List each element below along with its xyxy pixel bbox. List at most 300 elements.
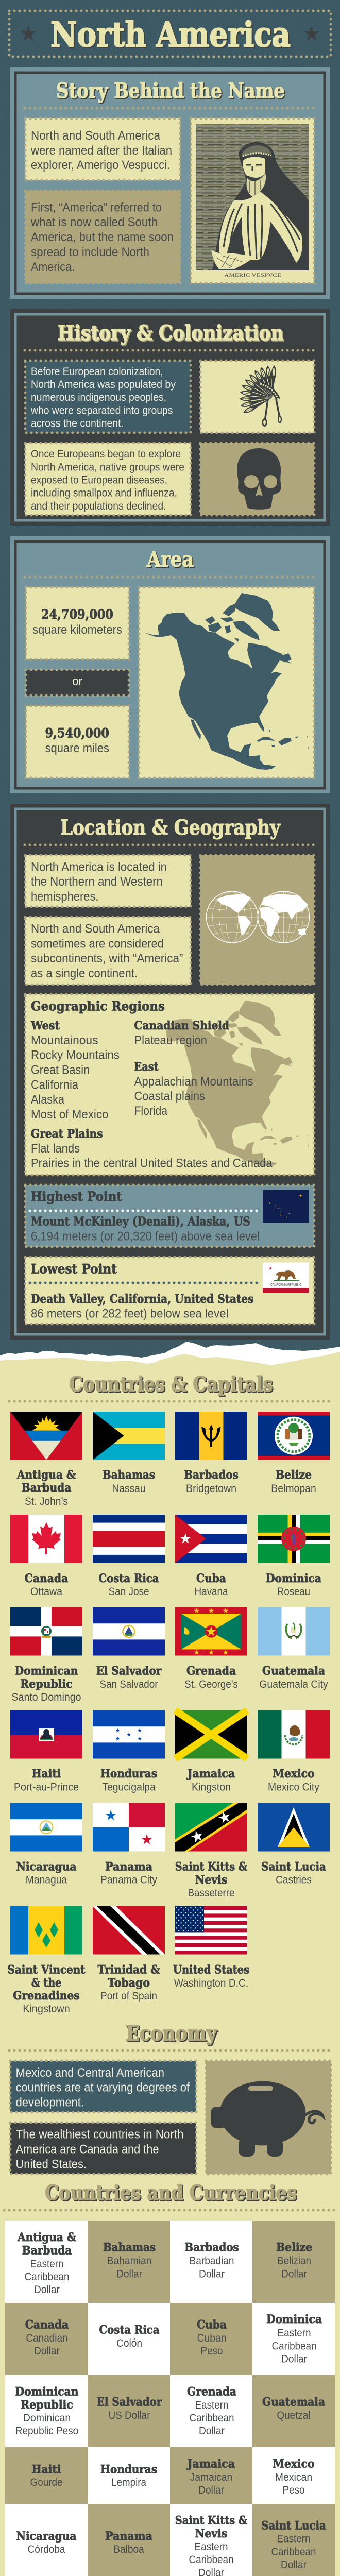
country label	[184, 1664, 238, 1690]
cell: Saint Kitts & Nevis: Nevis	[195, 2527, 227, 2540]
cell: Haiti: Gourde	[30, 2477, 63, 2488]
heading: Story Behind the Name: Story Behind the Name	[56, 79, 285, 103]
country label	[268, 1767, 319, 1793]
country: Saint Kitts & Nevis	[175, 1803, 247, 1899]
country label: Dominica	[266, 1572, 321, 1585]
cell: Dominican Republic	[5, 2375, 88, 2447]
map: North America	[139, 587, 314, 778]
stat: square miles: 9,540,000	[45, 725, 109, 741]
country label	[195, 1572, 228, 1598]
cell: Saint Lucia	[252, 2504, 335, 2576]
text box: subcontinents: subcontinents, with “America”	[31, 952, 183, 965]
flag: Bahamas	[93, 1412, 165, 1460]
panel: Highest Point: Mount McKinley (Denali), Alaska, US	[31, 1215, 250, 1228]
country label	[14, 1767, 79, 1793]
heading: History & Colonization: History & Colonization	[58, 321, 283, 345]
region: West: Great Basin	[31, 1063, 90, 1077]
flag: Cuba	[175, 1515, 247, 1563]
cell: Jamaica: Jamaican	[190, 2471, 232, 2483]
flag: Belize	[258, 1412, 330, 1460]
country label: Trinidad &	[98, 1963, 160, 1976]
cell: Guatemala	[252, 2375, 335, 2447]
torn paper edge: upper	[0, 1342, 340, 1370]
country label	[100, 1860, 157, 1886]
cell: Bahamas: Dollar	[116, 2268, 142, 2280]
region: Great Plains: Flat lands	[31, 1142, 80, 1156]
text box: naming: were named after the Italian	[30, 144, 172, 158]
country: Grenada	[175, 1607, 247, 1690]
flag: Dominica	[258, 1515, 330, 1563]
region: West	[30, 1019, 120, 1122]
cell: Dominican Republic: Dominican	[15, 2385, 78, 2399]
cell: Antigua & Barbuda: Antigua &	[17, 2231, 76, 2244]
country label: Costa Rica	[99, 1572, 159, 1585]
country label: Nassau	[112, 1483, 145, 1495]
country: Antigua & Barbuda	[10, 1412, 82, 1507]
cell: Dominican Republic: Republic Peso	[15, 2425, 78, 2437]
text box: subcontinents: North and South America	[31, 922, 160, 936]
heading: Countries and Currencies: Countries and Currencies	[45, 2181, 297, 2205]
cell: Haiti	[5, 2447, 88, 2504]
country label: San Salvador	[100, 1679, 158, 1690]
flag: Trinidad & Tobago	[93, 1906, 165, 1955]
stat: square kilometers: 24,709,000	[41, 607, 113, 622]
panel: Story Behind the Name	[10, 67, 330, 299]
country: El Salvador	[93, 1607, 165, 1690]
country label: Tegucigalpa	[102, 1782, 156, 1793]
text box: subcontinents: sometimes are considered	[31, 937, 164, 951]
region: East: East	[134, 1060, 159, 1074]
country: Belize	[258, 1412, 330, 1495]
panel: Location & Geography	[10, 804, 330, 1340]
country label	[103, 1468, 155, 1495]
country label: Barbados	[184, 1468, 239, 1482]
cell: Nicaragua: Córdoba	[28, 2544, 65, 2555]
country label	[259, 1664, 328, 1690]
country: Trinidad & Tobago	[93, 1906, 165, 2002]
flag: California	[263, 1262, 309, 1293]
title text: North America	[50, 14, 291, 55]
flag: Barbados	[175, 1412, 247, 1460]
cell: Saint Lucia: Dollar	[281, 2559, 307, 2571]
cell: Barbados: Barbados	[184, 2241, 239, 2255]
cell: Barbados	[170, 2221, 252, 2303]
cell: Antigua & Barbuda: Eastern	[30, 2258, 64, 2270]
icon: world globes	[200, 855, 314, 985]
cell: Saint Lucia: Caribbean	[271, 2546, 316, 2558]
country label: San Jose	[108, 1586, 149, 1598]
text box: European diseases: including smallpox and influenza,	[31, 487, 177, 499]
cell: Panama: Balboa	[113, 2544, 144, 2555]
country label: Cuba	[196, 1572, 226, 1585]
country label: Saint Vincent	[7, 1963, 86, 1976]
cell: Dominica: Dominica	[266, 2313, 322, 2326]
flag: Nicaragua	[10, 1803, 82, 1852]
country label: St. John’s	[25, 1496, 68, 1507]
flag: Canada	[10, 1515, 82, 1563]
country label	[266, 1572, 321, 1598]
cell: Mexico	[252, 2447, 335, 2504]
country label: United States	[173, 1963, 249, 1976]
country label: Port-au-Prince	[14, 1782, 79, 1793]
text box: naming	[25, 118, 180, 180]
country label: Grenada	[186, 1664, 236, 1677]
text box: spread of the name: what is now called South	[30, 215, 158, 229]
cell: Saint Kitts & Nevis: Saint Kitts &	[175, 2514, 247, 2528]
country label: Santo Domingo	[11, 1691, 81, 1703]
cell: Dominican Republic: Dominican	[23, 2412, 71, 2424]
cell: Antigua & Barbuda: Caribbean	[25, 2271, 69, 2283]
country label: & the	[31, 1976, 61, 1990]
cell: Haiti: Haiti	[32, 2463, 61, 2476]
cell: Dominica	[252, 2303, 335, 2375]
country: Haiti	[10, 1710, 82, 1793]
country label	[100, 1767, 157, 1793]
cell: Barbados: Barbadian	[190, 2255, 234, 2267]
panel: Lowest Point: 86 meters (or 282 feet) below sea level	[31, 1307, 229, 1321]
country label: Managua	[26, 1874, 67, 1886]
cell: Guatemala: Guatemala	[262, 2396, 325, 2409]
heading: Location & Geography: Location & Geography	[60, 816, 281, 840]
country label: Tobago	[108, 1976, 150, 1990]
flag: Haiti	[10, 1710, 82, 1759]
cell: Cuba: Cuba	[197, 2318, 227, 2332]
text box: European diseases: exposed to European diseases,	[31, 474, 167, 486]
flag: Honduras	[93, 1710, 165, 1759]
country label: Ottawa	[30, 1586, 62, 1598]
cell: Costa Rica: Costa Rica	[99, 2324, 160, 2337]
icon: right star	[304, 26, 319, 41]
country label	[184, 1468, 239, 1495]
cell: Guatemala: Quetzal	[277, 2410, 310, 2421]
country label: Saint Lucia	[261, 1860, 326, 1873]
country: Mexico	[258, 1710, 330, 1793]
country label: Basseterre	[188, 1887, 235, 1899]
country label: Canada	[25, 1572, 68, 1585]
country: Costa Rica	[93, 1515, 165, 1598]
country label	[16, 1860, 76, 1886]
cell: Belize	[252, 2221, 335, 2303]
country: Saint Vincent & the Grenadines	[7, 1906, 86, 2015]
cell: Dominican Republic: Republic	[21, 2398, 73, 2412]
flag: El Salvador	[93, 1607, 165, 1656]
caption: AMERIC VESPVCE	[224, 273, 282, 278]
cell: Dominica: Eastern	[277, 2327, 311, 2339]
cell: Nicaragua: Nicaragua	[16, 2530, 76, 2543]
cell: Antigua & Barbuda: Dollar	[34, 2284, 60, 2296]
panel: Lowest Point	[25, 1257, 314, 1324]
flag: Dominican Republic	[10, 1607, 82, 1656]
country label: Grenadines	[13, 1989, 80, 2003]
cell: Canada: Dollar	[34, 2345, 60, 2357]
cell: Cuba: Cuban	[197, 2332, 227, 2344]
text box: development: countries are at varying degrees of	[15, 2080, 190, 2095]
cell: Grenada	[170, 2375, 252, 2447]
country label: Belmopan	[271, 1483, 316, 1495]
country: Bahamas	[93, 1412, 165, 1495]
country: United States	[173, 1906, 249, 1989]
cell: Honduras: Honduras	[100, 2463, 157, 2476]
country: Saint Lucia	[258, 1803, 330, 1886]
country: Jamaica	[175, 1710, 247, 1793]
country label: Jamaica	[186, 1767, 235, 1781]
country label: Panama	[105, 1860, 152, 1873]
cell: Canada: Canada	[25, 2318, 69, 2332]
cell: Jamaica: Dollar	[198, 2484, 224, 2496]
background: dark teal striped upper section	[0, 0, 340, 1370]
country label: Belize	[276, 1468, 312, 1482]
cell: Canada: Canadian	[26, 2332, 68, 2344]
country: Barbados	[175, 1412, 247, 1495]
map: North America watermark	[166, 1001, 309, 1166]
panel: Highest Point: 6,194 meters (or 20,320 feet) above sea level	[31, 1229, 260, 1244]
region: Canadian Shield	[134, 1019, 229, 1047]
country: Dominican Republic	[10, 1607, 82, 1703]
country label	[96, 1664, 162, 1690]
flag: Alaska	[263, 1190, 309, 1223]
region: East: Appalachian Mountains	[134, 1075, 253, 1089]
image: portrait of Amerigo Vespucci	[191, 118, 314, 283]
region: West: West	[30, 1019, 60, 1032]
cell: Nicaragua	[5, 2504, 88, 2576]
country label	[98, 1963, 160, 2002]
heading: Economy: Economy	[126, 2022, 218, 2045]
country label	[261, 1860, 326, 1886]
country label: Castries	[276, 1874, 312, 1886]
country label: Kingstown	[23, 2003, 70, 2015]
country label	[271, 1468, 316, 1495]
icon: piggy bank	[206, 2061, 331, 2174]
icon: skull	[200, 443, 314, 515]
heading: Geographic Regions: Geographic Regions	[31, 998, 165, 1014]
country label	[16, 1468, 76, 1507]
country label: Mexico City	[268, 1782, 319, 1793]
text box: indigenous peoples	[25, 361, 191, 433]
cell: Saint Lucia: Saint Lucia	[261, 2519, 326, 2533]
stat: square kilometers	[26, 587, 129, 659]
country label: Saint Kitts &	[175, 1860, 247, 1873]
text box: European diseases: Once Europeans began to explore	[31, 448, 181, 460]
country label	[175, 1860, 247, 1899]
text box: wealthiest countries: United States.	[15, 2158, 87, 2171]
text box: spread of the name	[25, 191, 180, 283]
region: Great Plains: Prairies in the central United States and Canada	[31, 1156, 273, 1171]
flag: Grenada	[175, 1607, 247, 1656]
country: Cuba	[175, 1515, 247, 1598]
cell: Belize: Belize	[276, 2241, 312, 2255]
text box: naming: explorer, Amerigo Vespucci.	[31, 158, 170, 172]
country label: Kingston	[192, 1782, 231, 1793]
text box: indigenous peoples: across the continent.	[31, 417, 124, 430]
flag: Mexico	[258, 1710, 330, 1759]
flag: Saint Lucia	[258, 1803, 330, 1852]
text box: indigenous peoples: numerous indigenous peoples,	[31, 392, 166, 403]
country label: Mexico	[273, 1767, 314, 1781]
text box: hemispheres	[25, 855, 191, 907]
country label: Haiti	[32, 1767, 61, 1781]
country label: Roseau	[277, 1586, 310, 1598]
cell: Antigua & Barbuda: Barbuda	[22, 2244, 72, 2258]
text box: European diseases	[25, 443, 191, 515]
panel: Lowest Point: Death Valley, California, United States	[31, 1292, 253, 1306]
panel: Highest Point	[25, 1185, 314, 1247]
text box: spread of the name: America.	[31, 260, 75, 274]
flag: Jamaica	[175, 1710, 247, 1759]
country label: Havana	[195, 1586, 228, 1598]
country label: Barbuda	[22, 1481, 71, 1495]
cell: Panama: Panama	[105, 2530, 152, 2543]
text box: naming: North and South America	[31, 129, 161, 143]
cell: Barbados: Dollar	[199, 2268, 225, 2280]
text box: indigenous peoples: who were separated into groups	[30, 405, 173, 416]
background: cream middle section	[0, 1352, 340, 2576]
text box: development: development.	[15, 2096, 84, 2109]
cell: Bahamas	[88, 2221, 170, 2303]
cell: Saint Lucia: Eastern	[277, 2533, 310, 2545]
cell: Costa Rica: Colón	[116, 2337, 142, 2349]
country: Honduras	[93, 1710, 165, 1793]
stat: square miles: square miles	[45, 741, 109, 755]
text box: spread of the name: America, but the name soon	[31, 230, 174, 244]
cell: Saint Kitts & Nevis	[170, 2504, 252, 2576]
cell: Grenada: Dollar	[199, 2425, 225, 2437]
country label	[173, 1963, 249, 1989]
panel: Highest Point: Highest Point	[31, 1189, 122, 1204]
text box: wealthiest countries: The wealthiest countries in North	[15, 2128, 183, 2141]
region: West: Most of Mexico	[31, 1108, 108, 1122]
panel: Geographic Regions	[25, 994, 314, 1175]
text box: wealthiest countries: America are Canada and the	[15, 2142, 159, 2157]
country: Nicaragua	[10, 1803, 82, 1886]
country label: Washington D.C.	[174, 1977, 248, 1989]
cell: Belize: Dollar	[281, 2268, 307, 2280]
cell: Cuba	[170, 2303, 252, 2375]
region: West: California	[31, 1078, 79, 1092]
country label: Bahamas	[103, 1468, 155, 1482]
cell: Mexico: Mexico	[273, 2458, 314, 2471]
text box: spread of the name: spread to include North	[31, 245, 149, 259]
cell: Mexico: Mexican	[275, 2471, 312, 2483]
cell: Honduras	[88, 2447, 170, 2504]
panel: Area	[10, 536, 330, 793]
text box: European diseases: North America, native groups were	[31, 462, 184, 473]
country: Guatemala	[258, 1607, 330, 1690]
country label: Dominican	[14, 1664, 78, 1677]
region: Canadian Shield: Canadian Shield	[134, 1019, 229, 1032]
country label	[99, 1572, 159, 1598]
cell: Canada	[5, 2303, 88, 2375]
text box: subcontinents	[25, 917, 191, 985]
cell: Antigua & Barbuda	[5, 2221, 88, 2303]
table: countries and currencies	[5, 2221, 335, 2576]
country label	[7, 1963, 86, 2015]
cell: Mexico: Peso	[282, 2484, 305, 2496]
text box: indigenous peoples: North America was populated by	[31, 379, 176, 391]
panel: History & Colonization	[10, 309, 330, 526]
text box: wealthiest countries	[10, 2123, 196, 2174]
cell: El Salvador	[88, 2375, 170, 2447]
flag: Saint Kitts & Nevis	[175, 1803, 247, 1852]
region: Canadian Shield: Plateau region	[134, 1033, 207, 1047]
text box: spread of the name: First, “America” referred to	[31, 201, 162, 214]
cell: Belize: Belizian	[277, 2255, 311, 2267]
region: Great Plains: Great Plains	[31, 1127, 103, 1141]
flag: Guatemala	[258, 1607, 330, 1656]
text box: development	[10, 2061, 196, 2112]
heading: Area: Area	[146, 547, 194, 572]
country label	[11, 1664, 81, 1703]
country label: Antigua &	[16, 1468, 76, 1482]
cell: Dominica: Dollar	[281, 2353, 307, 2365]
icon: left star	[21, 26, 36, 41]
flag: Saint Vincent & the Grenadines	[10, 1906, 82, 1955]
cell: Saint Kitts & Nevis: Eastern	[195, 2541, 228, 2553]
country label	[25, 1572, 68, 1598]
cell: Cuba: Peso	[201, 2345, 223, 2357]
country label: Guatemala City	[259, 1679, 328, 1690]
stat: or: or	[72, 674, 82, 688]
region: West: Rocky Mountains	[31, 1048, 120, 1062]
text box: hemispheres: North America is located in	[31, 860, 167, 874]
flag: United States	[175, 1906, 247, 1955]
cell: Grenada: Grenada	[187, 2385, 236, 2399]
cell: Jamaica	[170, 2447, 252, 2504]
cell: Honduras: Lempira	[111, 2477, 146, 2488]
cell: Bahamas: Bahamas	[103, 2241, 156, 2255]
stat: square kilometers: square kilometers	[32, 623, 122, 637]
text box: hemispheres: the Northern and Western	[31, 875, 163, 889]
text box: subcontinents: as a single continent.	[31, 967, 138, 980]
icon: feather headdress	[200, 361, 314, 433]
cell: Dominica: Caribbean	[272, 2340, 316, 2352]
flag: California: CALIFORNIA REPUBLIC	[270, 1283, 301, 1287]
cell: Grenada: Eastern	[195, 2399, 229, 2411]
cell: Saint Kitts & Nevis: Caribbean	[189, 2554, 234, 2566]
cell: Panama	[88, 2504, 170, 2576]
country: Panama	[93, 1803, 165, 1886]
country: Dominica	[258, 1515, 330, 1598]
cell: El Salvador: US Dollar	[108, 2410, 150, 2421]
region: West: Mountainous	[31, 1033, 98, 1047]
country label: St. George’s	[184, 1679, 238, 1690]
stat: or	[26, 670, 129, 696]
country label: Guatemala	[262, 1664, 325, 1677]
title block	[9, 11, 331, 57]
country label: Port of Spain	[100, 1990, 157, 2002]
region: East	[134, 1060, 253, 1118]
text box: indigenous peoples: Before European colonization,	[31, 366, 163, 378]
cell: Jamaica: Jamaica	[186, 2458, 235, 2471]
heading: Countries & Capitals: Countries & Capitals	[69, 1372, 273, 1396]
text box: development: Mexico and Central American	[15, 2066, 164, 2080]
country label: Nicaragua	[16, 1860, 76, 1873]
cell: Bahamas: Bahamian	[107, 2255, 151, 2267]
flag: Panama	[93, 1803, 165, 1852]
country label: Nevis	[195, 1873, 227, 1887]
flag: Antigua & Barbuda	[10, 1412, 82, 1460]
text box: hemispheres: hemispheres.	[31, 890, 99, 904]
country label: El Salvador	[96, 1664, 162, 1677]
country label: Bridgetown	[186, 1483, 236, 1495]
cell: Grenada: Caribbean	[190, 2412, 234, 2424]
country label: Honduras	[100, 1767, 157, 1781]
country: Canada	[10, 1515, 82, 1598]
region: East: Florida	[134, 1104, 168, 1118]
panel: Lowest Point: Lowest Point	[31, 1261, 117, 1277]
region: West: Alaska	[31, 1093, 65, 1107]
cell: El Salvador: El Salvador	[97, 2396, 162, 2409]
region: Great Plains	[31, 1127, 273, 1171]
